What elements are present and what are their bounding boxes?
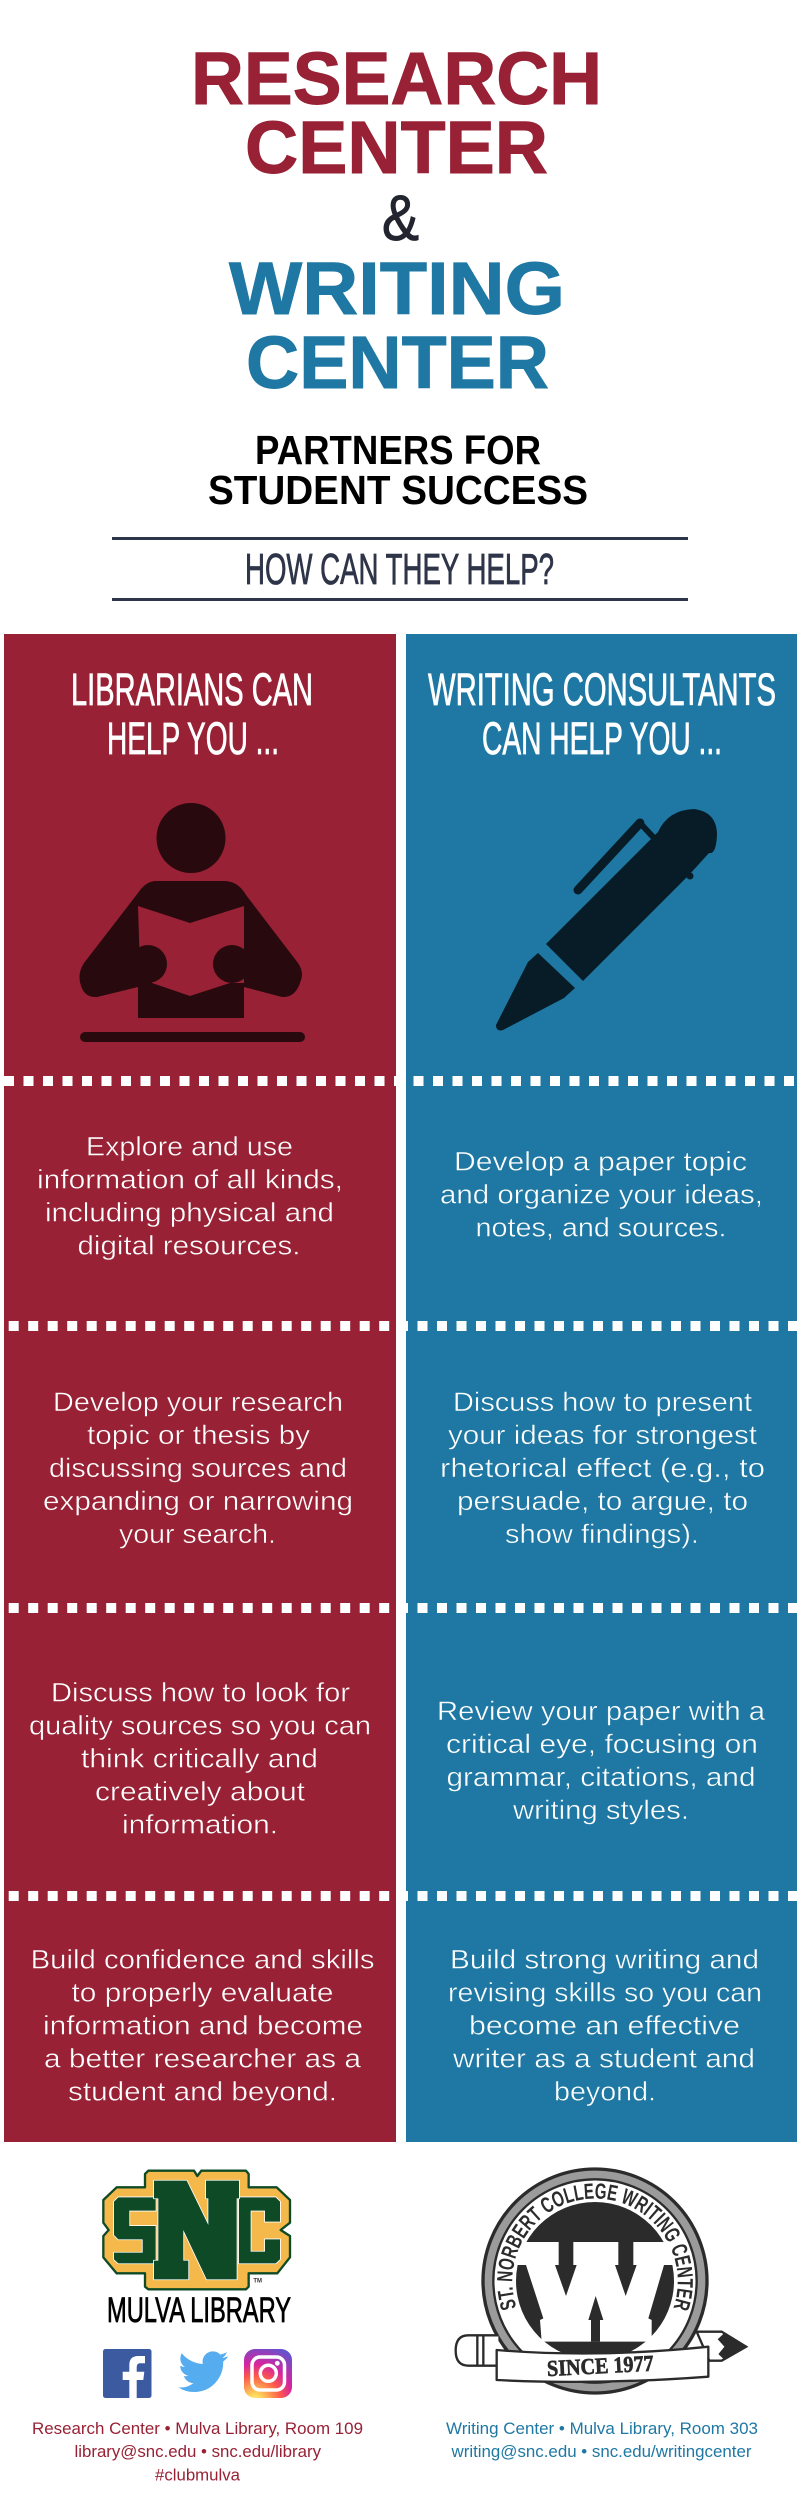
text: build strong writing: become an effective [469,2010,740,2040]
contact: writing center: Writing Center • Mulva Library, Room 303 [446,2419,758,2438]
contact: writing center [446,2419,758,2461]
text: build confidence: Build confidence and skills [31,1944,375,1974]
title line: research center [191,37,602,189]
text: develop a paper topic: Develop a paper topic [454,1147,747,1177]
title line: research center: RESEARCH [191,37,602,120]
text: explore: including physical and [45,1197,334,1227]
text: develop a paper topic [440,1147,763,1242]
logo: SNC: TM [253,2279,262,2285]
W emblem [515,2242,675,2342]
pencil [456,2332,746,2366]
text: build confidence: a better researcher as a [44,2043,362,2073]
text: develop research: Develop your research [53,1387,343,1417]
text: build strong writing: Build strong writing and [450,1944,759,1974]
icon: pen [496,809,717,1030]
text: quality sources: quality sources so you can [29,1711,371,1741]
contact: research center: #clubmulva [155,2466,241,2484]
icon: instagram [244,2349,292,2398]
text: discuss how to present: Discuss how to present [453,1387,753,1417]
title line: research center: CENTER [245,106,548,189]
section heading: HOW CAN THEY HELP? [245,545,554,594]
seal circular text: ST. NORBERT COLLEGE WRITING CENTER [497,2183,693,2310]
icon: twitter [178,2351,228,2392]
title line: writing center: WRITING [229,247,565,330]
text: explore: Explore and use [86,1132,293,1162]
panel: librarians [4,634,396,2142]
text: build confidence: student and beyond. [68,2076,337,2106]
text: quality sources: information. [122,1810,278,1840]
text: explore: information of all kinds, [37,1164,343,1194]
text: build strong writing: writer as a student and [452,2043,755,2073]
seal rings [483,2169,707,2393]
ribbon text: SINCE 1977 [546,2351,654,2381]
heading: librarians can help you [71,664,313,764]
text: develop a paper topic: and organize your ideas, [440,1179,763,1209]
subtitle: STUDENT SUCCESS [208,467,588,513]
logo: writing center seal [454,2167,748,2395]
title [191,37,602,404]
text: develop research: discussing sources and [49,1453,347,1483]
panel: writing consultants [406,634,797,2142]
contact: writing center: writing@snc.edu • snc.edu/writingcenter [451,2442,752,2461]
text: quality sources: creatively about [95,1777,306,1807]
text: discuss how to present: persuade, to argue, to [457,1486,748,1516]
text: review your paper [437,1696,766,1825]
text: build confidence: to properly evaluate [72,1977,334,2007]
text: explore [37,1132,343,1260]
text: discuss how to present [440,1387,765,1549]
text: develop a paper topic: notes, and sources. [476,1212,726,1242]
text: review your paper: Review your paper with a [437,1696,766,1726]
contact: research center [32,2419,363,2484]
ampersand: & [382,182,419,254]
text: review your paper: writing styles. [512,1795,689,1825]
text: build strong writing: beyond. [554,2076,656,2106]
contact: research center: library@snc.edu • snc.edu/library [74,2442,321,2461]
text: build strong writing [448,1944,762,2106]
logo label: Mulva Library: MULVA LIBRARY [107,2291,291,2330]
text: discuss how to present: rhetorical effect (e.g., to [440,1453,765,1483]
text: build confidence [31,1944,375,2106]
subtitle [208,427,588,513]
logo: SNC [103,2171,290,2289]
subtitle: PARTNERS FOR [255,427,541,473]
title line: writing center: CENTER [246,321,549,404]
text: review your paper: grammar, citations, and [446,1762,756,1792]
text: build strong writing: revising skills so you can [448,1977,762,2007]
heading: librarians can help you: HELP YOU ... [107,713,279,764]
heading: writing consultants can help you [428,664,776,764]
text: discuss how to present: show findings). [505,1519,699,1549]
heading: librarians can help you: LIBRARIANS CAN [71,664,313,715]
text: develop research: expanding or narrowing [43,1486,353,1516]
text: quality sources [29,1678,371,1840]
icon: facebook [103,2349,152,2398]
text: review your paper: critical eye, focusing on [446,1729,758,1759]
text: quality sources: think critically and [81,1744,318,1774]
ribbon [497,2347,708,2382]
icon: person reading a book [80,803,305,1042]
text: quality sources: Discuss how to look for [51,1678,350,1708]
text: develop research: topic or thesis by [87,1420,311,1450]
text: explore: digital resources. [78,1230,300,1260]
text: build confidence: information and become [43,2010,363,2040]
text: develop research [43,1387,353,1549]
title line: writing center [229,247,565,404]
text: discuss how to present: your ideas for strongest [448,1420,758,1450]
contact: research center: Research Center • Mulva Library, Room 109 [32,2419,363,2438]
text: develop research: your search. [119,1519,276,1549]
